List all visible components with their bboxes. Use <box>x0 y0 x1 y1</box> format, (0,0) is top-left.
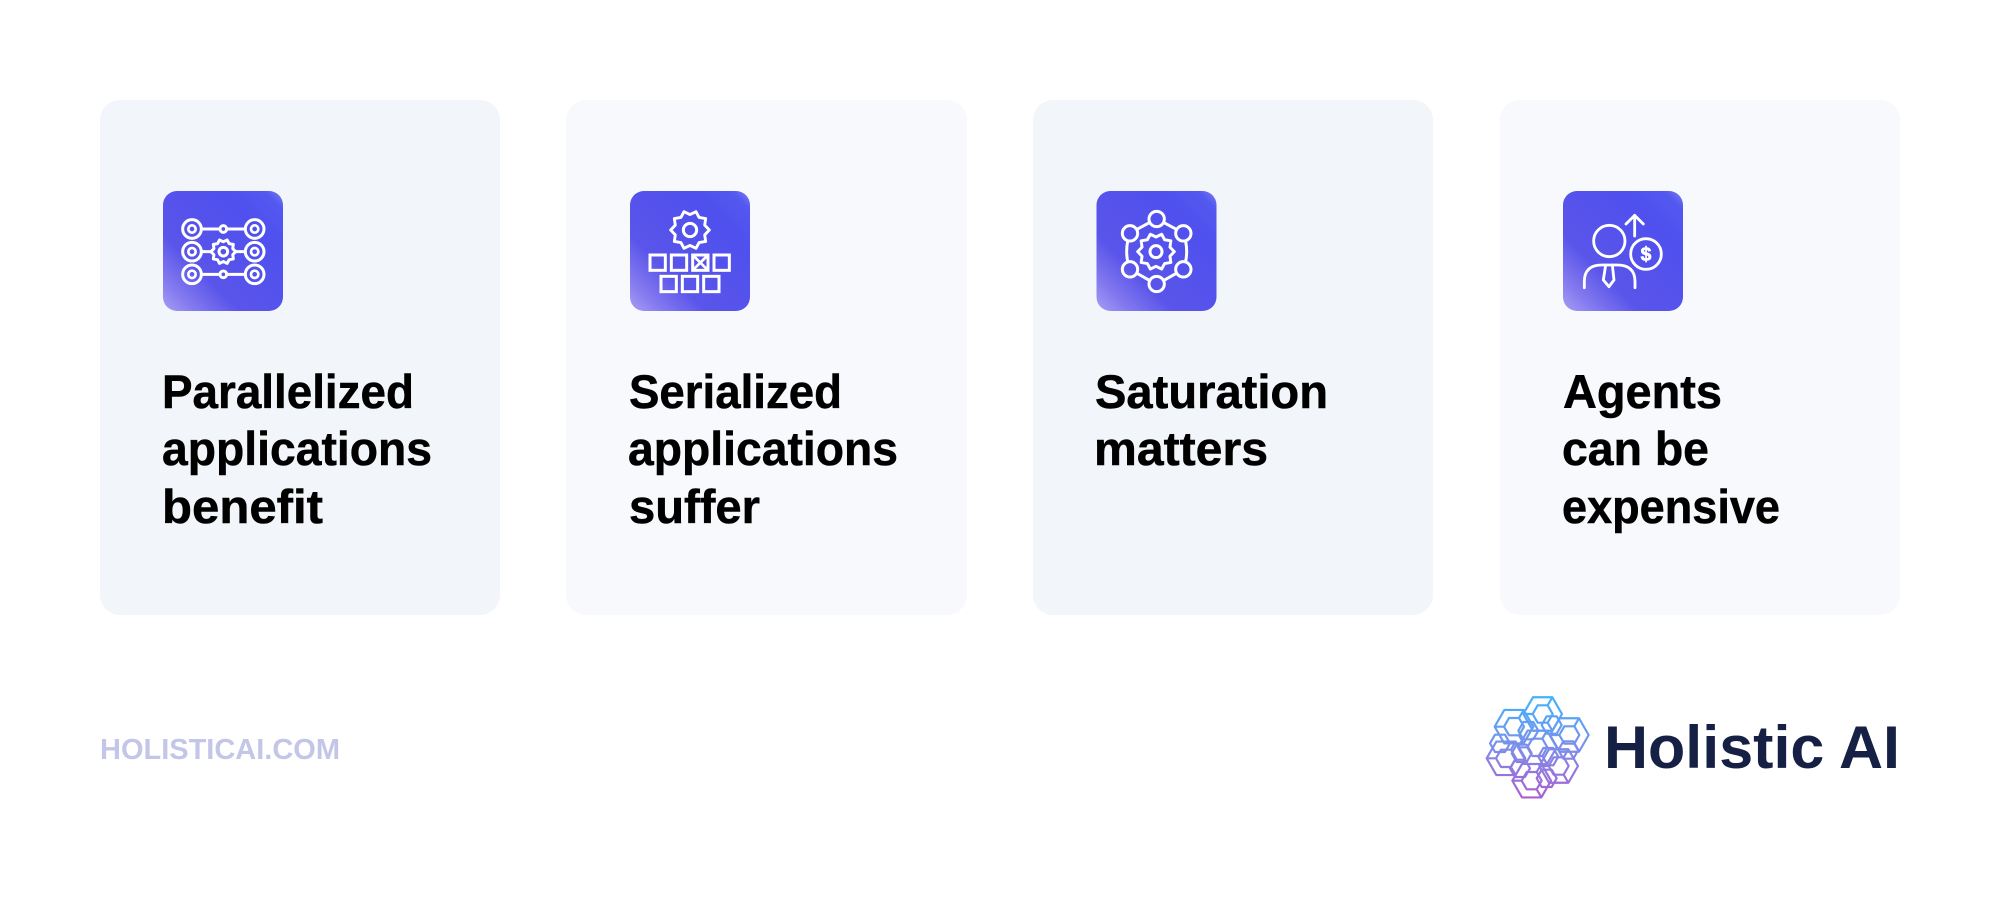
heading: agents can be expensive <box>1562 365 1780 533</box>
heading: serialized applications suffer <box>628 365 898 533</box>
panel: parallelized applications benefit <box>100 100 500 615</box>
panel: serialized applications suffer <box>566 100 967 615</box>
icon: gear in node ring <box>1096 191 1216 311</box>
heading: serialized applications suffer: suffer <box>629 480 760 533</box>
heading: serialized applications suffer: applications <box>628 422 898 475</box>
heading: parallelized applications benefit: benefit <box>162 480 323 533</box>
icon: parallel nodes with gear <box>163 191 283 311</box>
heading: parallelized applications benefit <box>162 365 432 533</box>
heading: saturation matters <box>1094 365 1328 475</box>
website url: HOLISTICAI.COM <box>100 734 340 766</box>
heading: parallelized applications benefit: applications <box>162 422 432 475</box>
panel: agents can be expensive <box>1500 100 1900 615</box>
heading: agents can be expensive: can be <box>1562 422 1709 475</box>
heading: agents can be expensive: Agents <box>1563 365 1722 418</box>
icon: gear with task squares <box>630 191 750 311</box>
logo: wordmark: Holistic AI <box>1604 714 1900 781</box>
heading: agents can be expensive: expensive <box>1562 480 1780 533</box>
icon: agent with rising cost: $ <box>1641 245 1652 266</box>
heading: saturation matters: matters <box>1094 422 1268 475</box>
heading: parallelized applications benefit: Parallelized <box>162 365 414 418</box>
panel: saturation matters <box>1033 100 1433 615</box>
heading: saturation matters: Saturation <box>1095 365 1328 418</box>
logo: hexagon mark <box>1487 697 1589 797</box>
heading: serialized applications suffer: Serialized <box>629 365 842 418</box>
icon: agent with rising cost <box>1563 191 1683 311</box>
